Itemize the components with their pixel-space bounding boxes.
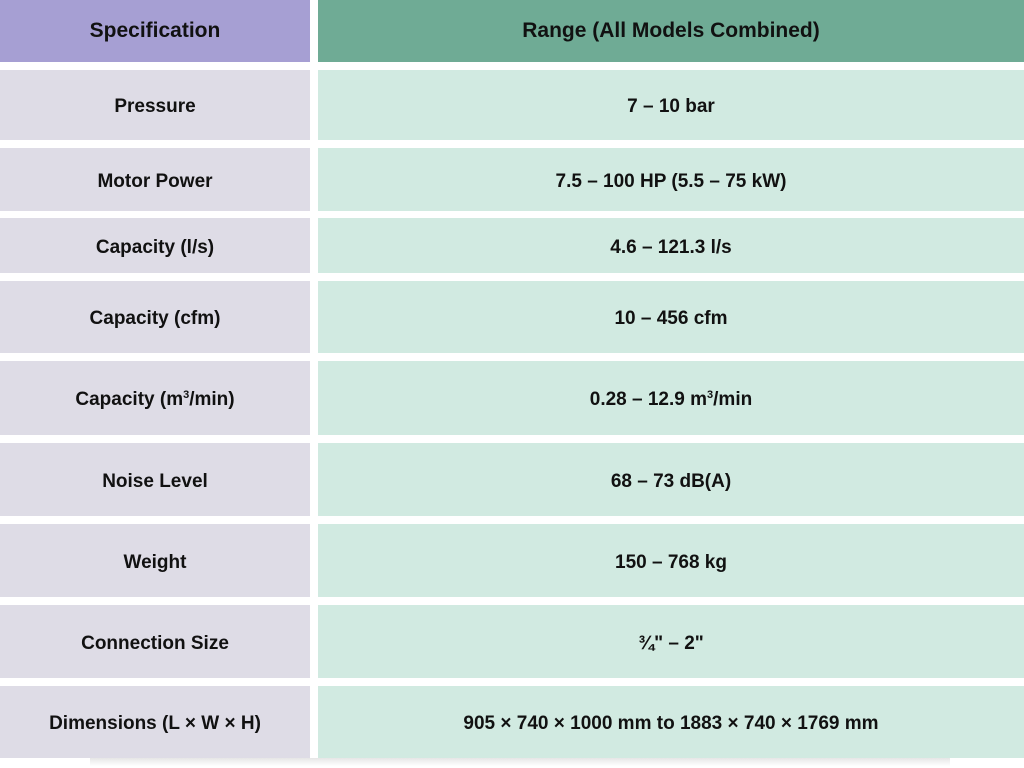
- row: motor power value: [318, 148, 1024, 211]
- row: dimensions label: [0, 686, 310, 758]
- row: pressure label: [0, 70, 310, 140]
- row: dimensions value: [318, 686, 1024, 758]
- row: dimensions label: Dimensions (L × W × H): [49, 713, 261, 734]
- row: motor power label: [0, 148, 310, 211]
- header: range: Range (All Models Combined): [522, 19, 820, 42]
- row: capacity m3 value: 0.28 – 12.9 m3/min: [590, 389, 752, 410]
- row: capacity l/s value: [318, 218, 1024, 273]
- row: capacity m3 value: [318, 361, 1024, 435]
- shadow under table: [90, 758, 950, 766]
- header: specification: Specification: [90, 19, 220, 42]
- row: capacity m3 label: Capacity (m3/min): [75, 389, 235, 410]
- row: motor power label: Motor Power: [97, 170, 213, 192]
- row: capacity l/s value: 4.6 – 121.3 l/s: [610, 236, 732, 258]
- row: capacity cfm label: [0, 281, 310, 353]
- row: capacity cfm value: [318, 281, 1024, 353]
- row: connection label: [0, 605, 310, 678]
- row: weight value: [318, 524, 1024, 597]
- header: specification: [0, 0, 310, 62]
- row: dimensions value: 905 × 740 × 1000 mm to 1883 × 740 × 1769 mm: [463, 713, 879, 734]
- row: connection value: ¾" – 2": [638, 632, 704, 654]
- row: noise label: Noise Level: [102, 470, 208, 492]
- row: capacity cfm value: 10 – 456 cfm: [614, 308, 728, 329]
- row: capacity cfm label: Capacity (cfm): [90, 308, 220, 329]
- row: capacity m3 label: [0, 361, 310, 435]
- row: motor power value: 7.5 – 100 HP (5.5 – 75 kW): [556, 170, 786, 192]
- row: capacity l/s label: Capacity (l/s): [96, 236, 214, 258]
- row: noise value: 68 – 73 dB(A): [611, 470, 731, 492]
- row: weight value: 150 – 768 kg: [615, 552, 727, 572]
- header: range: [318, 0, 1024, 62]
- row: noise label: [0, 443, 310, 516]
- row: pressure label: Pressure: [114, 96, 196, 117]
- row: pressure value: 7 – 10 bar: [627, 96, 715, 117]
- row: pressure value: [318, 70, 1024, 140]
- row: connection value: [318, 605, 1024, 678]
- row: weight label: Weight: [124, 552, 186, 572]
- row: capacity l/s label: [0, 218, 310, 273]
- row: weight label: [0, 524, 310, 597]
- row: noise value: [318, 443, 1024, 516]
- row: connection label: Connection Size: [81, 632, 229, 654]
